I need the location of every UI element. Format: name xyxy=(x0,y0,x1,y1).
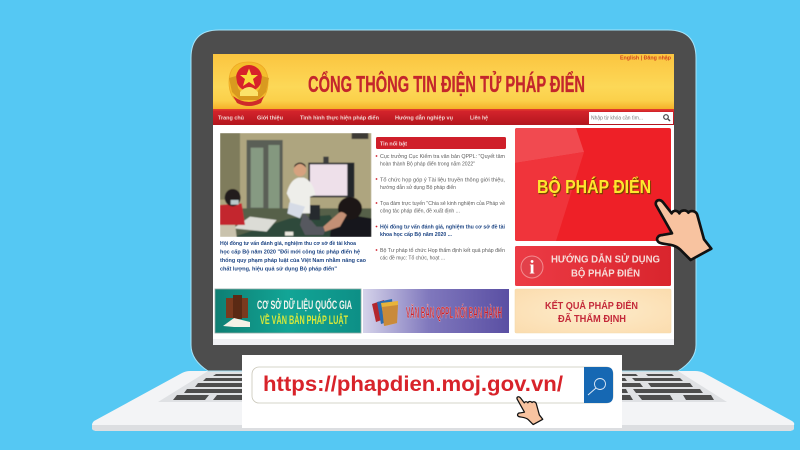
news list: Hội đồng tư vấn đánh giá, nghiệm thu cơ sở đề tài xyxy=(380,224,506,230)
nav labels: Tình hình thực hiện pháp điển xyxy=(300,114,379,122)
panel: Bộ pháp điển button xyxy=(515,128,671,241)
search box: Nhập từ khóa cần tìm... xyxy=(591,116,643,122)
laptop base xyxy=(92,371,794,431)
news list: Cục trưởng Cục Kiểm tra văn bản QPPL: "Quyết tâm xyxy=(380,153,505,160)
panel: usage guide button xyxy=(515,246,671,286)
news list xyxy=(376,153,506,262)
URL search bar xyxy=(252,367,613,403)
site header banner xyxy=(213,54,674,109)
photo caption: học cấp Bộ năm 2020 "Đổi mới công tác pháp điển hệ xyxy=(220,248,360,256)
panel: national legal database banner: VỀ VĂN BẢN PHÁP LUẬT xyxy=(260,312,348,327)
site title: CỔNG THÔNG TIN ĐIỆN TỬ PHÁP ĐIỂN xyxy=(308,69,585,97)
keyboard xyxy=(158,371,727,402)
icon: national emblem xyxy=(229,62,269,106)
panel: national legal database banner xyxy=(215,289,361,333)
navigation bar xyxy=(213,109,674,125)
icon: info: i xyxy=(529,258,535,278)
news photo xyxy=(220,133,371,237)
icon: folders xyxy=(372,299,398,326)
photo caption: Hội đồng tư vấn đánh giá, nghiệm thu cơ sở đề tài khoa xyxy=(220,240,357,247)
panel: verified results button: ĐÃ THẨM ĐỊNH xyxy=(558,312,626,325)
news heading: Tin nổi bật xyxy=(380,140,407,148)
icon: small pointing hand xyxy=(517,397,543,425)
panel: verified results button: KẾT QUẢ PHÁP ĐIỂN xyxy=(545,299,638,312)
news list: Bộ Tư pháp tổ chức Họp thẩm định kết quả pháp điển xyxy=(380,247,505,254)
panel: national legal database banner: CƠ SỞ DỮ LIỆU QUỐC GIA xyxy=(257,297,352,312)
nav labels: Liên hệ xyxy=(470,116,488,122)
nav labels: Hướng dẫn nghiệp vụ xyxy=(395,114,453,122)
photo caption: chất lượng, hiệu quả sử dụng Bộ pháp điển" xyxy=(220,266,337,272)
news list: công tác pháp điển, đề xuất định ... xyxy=(380,208,460,214)
icon: large pointing hand xyxy=(656,200,711,260)
news list: Tọa đàm trực tuyến "Chia sẻ kinh nghiệm của Pháp về xyxy=(380,200,505,207)
icon: books xyxy=(223,295,250,327)
icon: info xyxy=(521,256,543,278)
photo caption xyxy=(220,240,366,272)
news list: Tổ chức họp góp ý Tài liệu truyền thông giới thiệu, xyxy=(380,176,505,184)
panel: featured news xyxy=(376,137,506,262)
laptop lid xyxy=(191,30,696,371)
panel: usage guide button: BỘ PHÁP ĐIỂN xyxy=(571,266,640,280)
search box xyxy=(589,112,673,124)
screen: website: VĂN BẢN QPPL MỚI BAN HÀNH xyxy=(406,303,502,322)
nav labels: Giới thiệu xyxy=(257,116,283,122)
photo caption: thống quy phạm pháp luật của Việt Nam nhằm nâng cao xyxy=(220,257,366,264)
panel: verified results button xyxy=(515,289,671,333)
panel: URL card xyxy=(242,355,622,428)
panel: new legal documents banner xyxy=(363,289,509,333)
icon: magnifier xyxy=(588,378,606,395)
panel: Bộ pháp điển button: BỘ PHÁP ĐIỂN xyxy=(537,176,651,197)
URL text: https://phapdien.moj.gov.vn/ xyxy=(263,373,563,396)
header links: English | Đăng nhập xyxy=(620,56,672,62)
screen: website xyxy=(213,54,674,345)
nav labels xyxy=(218,114,488,122)
news list: hướng dẫn sử dụng Bộ pháp điển xyxy=(380,184,456,191)
panel: usage guide button: HƯỚNG DẪN SỬ DỤNG xyxy=(551,252,660,266)
nav labels: Trang chủ xyxy=(218,116,244,122)
panel: Bộ pháp điển button: BỘ PHÁP ĐIỂN xyxy=(538,177,652,198)
news list: khoa học cấp Bộ năm 2020 ... xyxy=(380,231,453,238)
news list: hoàn thành Bộ pháp điển trong năm 2022" xyxy=(380,160,475,168)
news list: các đề mục: Tổ chức, hoạt ... xyxy=(380,254,445,262)
